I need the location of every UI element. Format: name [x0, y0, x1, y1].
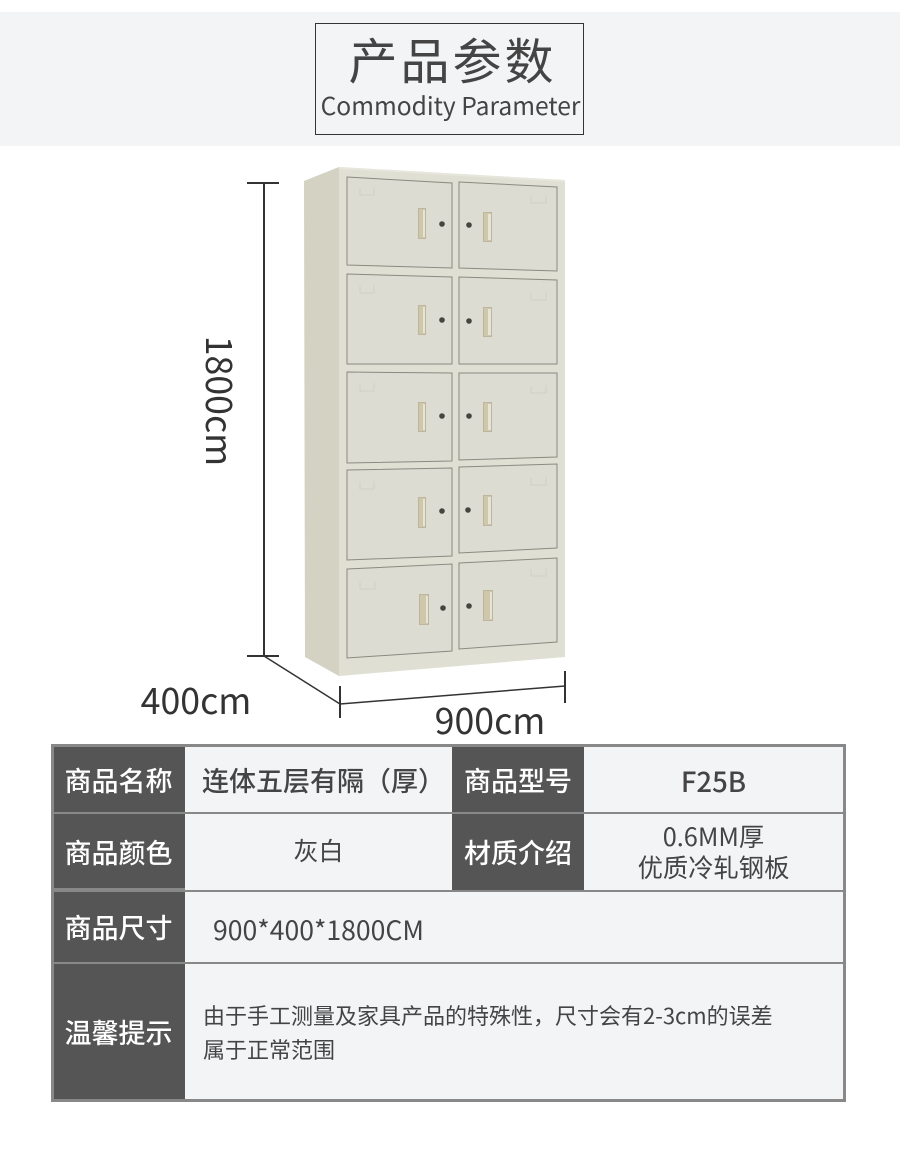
row 4 label: notice [54, 964, 185, 1099]
row 1 label: name: 商品名称 [64, 760, 172, 799]
row 3 label: size: 商品尺寸 [64, 906, 172, 946]
row 3 value: size: 900*400*1800CM [213, 909, 424, 948]
row 2 label: colour: 商品颜色 [64, 832, 172, 870]
depth dimension line [264, 656, 340, 704]
height label: 1800cm [195, 336, 246, 466]
row 1 label: model [452, 747, 584, 812]
cabinet doors [347, 177, 557, 658]
row 3 label: size [54, 892, 185, 962]
handle highlights [423, 210, 492, 623]
width dimension line [340, 671, 565, 718]
row 2 value: colour: 灰白 [293, 832, 344, 868]
row 1 label: name [54, 747, 185, 812]
header band [0, 12, 900, 146]
row 4 value: notice: 属于正常范围 [203, 1033, 335, 1065]
row 4 label: notice: 温馨提示 [64, 1012, 172, 1051]
door label holders [360, 187, 546, 589]
row 1 value: model [584, 747, 843, 812]
row 2 value: material: 0.6MM厚 [663, 818, 764, 854]
height dimension line [247, 183, 279, 656]
row 4 value: notice [185, 964, 843, 1099]
row 1 value: name [185, 747, 452, 812]
title: 产品参数 [348, 23, 556, 94]
width label: 900cm [435, 694, 545, 745]
parameter table [51, 744, 846, 1102]
row 2 label: colour [54, 812, 185, 888]
product image: cabinet with dimension lines [247, 167, 566, 718]
door locks [439, 221, 472, 611]
row 1 value: name: 连体五层有隔（厚） [202, 760, 445, 799]
row 1 label: model: 商品型号 [464, 760, 572, 799]
cabinet body [304, 167, 565, 676]
depth label: 400cm [141, 674, 251, 725]
door handles [418, 208, 492, 624]
row 2 label: material [452, 814, 584, 890]
row 2 value: colour [185, 814, 452, 890]
row 2 label: material: 材质介绍 [464, 832, 572, 870]
row 4 value: notice: 由于手工测量及家具产品的特殊性，尺寸会有2-3cm的误差 [203, 999, 773, 1031]
row 3 value: size [185, 892, 843, 962]
row 2 value: material [584, 814, 843, 890]
title box [315, 23, 584, 135]
row 2 value: material: 优质冷轧钢板 [638, 849, 789, 885]
subtitle: Commodity Parameter [321, 87, 580, 123]
row 1 value: model: F25B [681, 760, 746, 800]
